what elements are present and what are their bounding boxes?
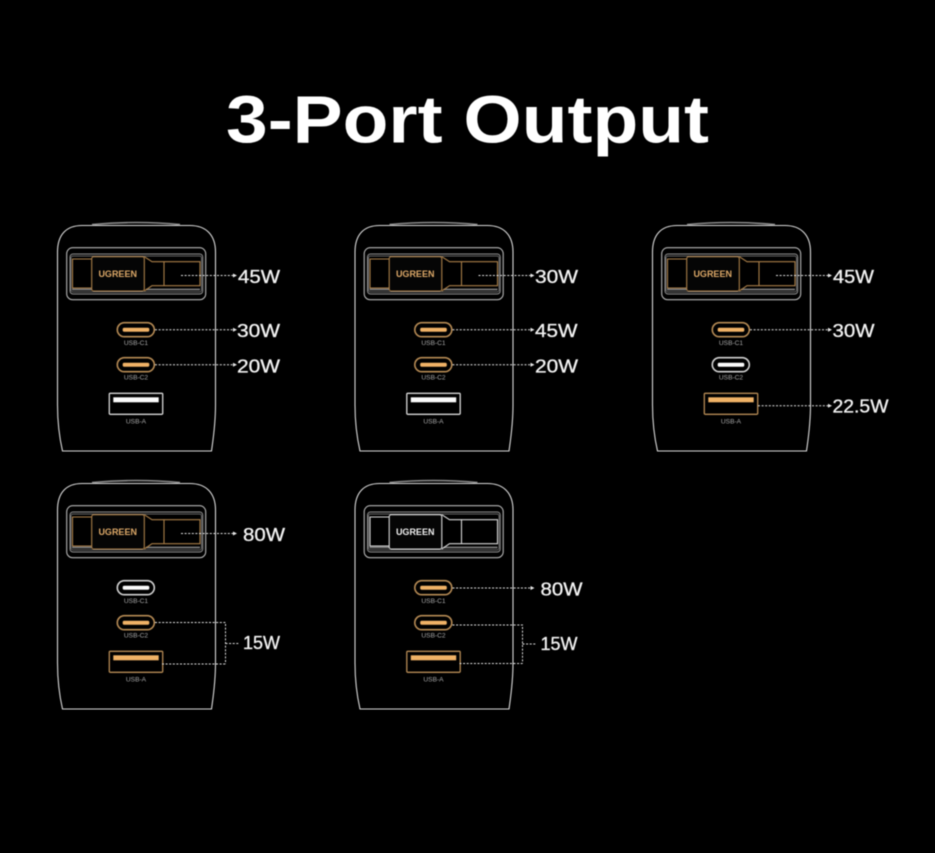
retractable plug slot xyxy=(364,506,503,558)
port: USB-A: USB-A xyxy=(126,418,147,426)
top highlight xyxy=(92,222,180,224)
port: USB-C1: USB-C1 xyxy=(719,340,743,347)
port: USB-C1: USB-C1 xyxy=(124,340,148,347)
port: USB-C1 xyxy=(712,323,749,347)
bracket and 15W xyxy=(155,622,281,664)
charger body xyxy=(58,484,216,709)
retractable plug slot: UGREEN xyxy=(396,527,434,537)
retractable plug slot: UGREEN xyxy=(98,269,137,279)
port: USB-C1 xyxy=(415,581,452,605)
panel: charger 3, 45W 30W 22.5W xyxy=(652,222,889,451)
arrow and 30W: 30W xyxy=(832,320,875,341)
port: USB-C2 xyxy=(117,616,154,640)
top highlight xyxy=(92,480,180,482)
port: USB-C2: USB-C2 xyxy=(421,374,446,382)
port: USB-C1 xyxy=(117,581,154,605)
retractable plug slot: UGREEN xyxy=(693,269,732,279)
arrow and 30W xyxy=(750,320,875,341)
arrow and 30W: 30W xyxy=(535,266,579,287)
port: USB-A: USB-A xyxy=(721,418,742,426)
arrow and 45W: 45W xyxy=(238,266,281,287)
port: USB-C2: USB-C2 xyxy=(124,374,148,382)
retractable plug slot: UGREEN xyxy=(98,527,137,537)
bracket and 15W xyxy=(452,625,578,664)
panel: charger 1, 45W 30W 20W xyxy=(58,222,281,451)
charger body xyxy=(355,226,513,451)
arrow and 20W: 20W xyxy=(535,356,579,376)
port: USB-A: USB-A xyxy=(423,676,444,684)
bracket and 15W: 15W xyxy=(243,632,281,653)
arrow and 30W: 30W xyxy=(237,320,281,341)
top highlight xyxy=(687,222,775,224)
port: USB-C1: USB-C1 xyxy=(421,340,446,347)
retractable plug slot xyxy=(67,506,206,558)
arrow and 30W xyxy=(155,320,281,341)
arrow and 22.5W: 22.5W xyxy=(832,396,889,417)
port: USB-A xyxy=(407,651,460,684)
port: USB-C1 xyxy=(415,323,452,347)
arrow and 80W xyxy=(452,578,583,600)
charger body xyxy=(652,226,810,451)
retractable plug slot xyxy=(662,248,801,300)
port: USB-A xyxy=(704,393,758,426)
charger body xyxy=(58,226,216,451)
port: USB-A: USB-A xyxy=(423,418,444,426)
retractable plug slot: UGREEN xyxy=(396,269,434,279)
arrow and 30W xyxy=(478,266,579,287)
title: 3-Port Output xyxy=(226,82,709,158)
panel: charger 4, 80W and shared 15W xyxy=(58,480,286,709)
port: USB-C2 xyxy=(415,358,452,382)
arrow and 80W: 80W xyxy=(540,578,583,600)
port: USB-C1: USB-C1 xyxy=(421,598,446,605)
arrow and 45W xyxy=(776,266,875,287)
arrow and 20W xyxy=(155,356,281,376)
arrow and 80W: 80W xyxy=(243,524,286,545)
port: USB-A: USB-A xyxy=(126,676,147,684)
port: USB-A xyxy=(109,393,163,426)
port: USB-C1 xyxy=(117,323,154,347)
port: USB-C2 xyxy=(415,616,452,640)
port: USB-C2 xyxy=(712,358,749,382)
arrow and 45W xyxy=(181,266,281,287)
arrow and 22.5W xyxy=(758,396,889,417)
port: USB-C2: USB-C2 xyxy=(719,374,743,382)
top highlight xyxy=(390,480,478,482)
bracket and 15W: 15W xyxy=(540,633,578,654)
arrow and 80W xyxy=(181,524,286,545)
arrow and 20W: 20W xyxy=(237,356,281,376)
port: USB-C2: USB-C2 xyxy=(421,632,446,640)
arrow and 45W: 45W xyxy=(535,320,578,341)
top highlight xyxy=(390,222,478,224)
arrow and 20W xyxy=(452,356,579,376)
charger body xyxy=(355,484,513,709)
port: USB-C2 xyxy=(117,358,154,382)
port: USB-C1: USB-C1 xyxy=(124,598,148,605)
panel: charger 5, 80W and shared 15W, white plug xyxy=(355,480,583,709)
arrow and 45W xyxy=(452,320,578,341)
retractable plug slot xyxy=(67,248,206,300)
arrow and 45W: 45W xyxy=(833,266,875,287)
port: USB-A xyxy=(407,393,460,426)
port: USB-C2: USB-C2 xyxy=(124,632,148,640)
port: USB-A xyxy=(109,651,163,684)
retractable plug slot xyxy=(364,248,503,300)
panel: charger 2, 30W 45W 20W xyxy=(355,222,579,451)
